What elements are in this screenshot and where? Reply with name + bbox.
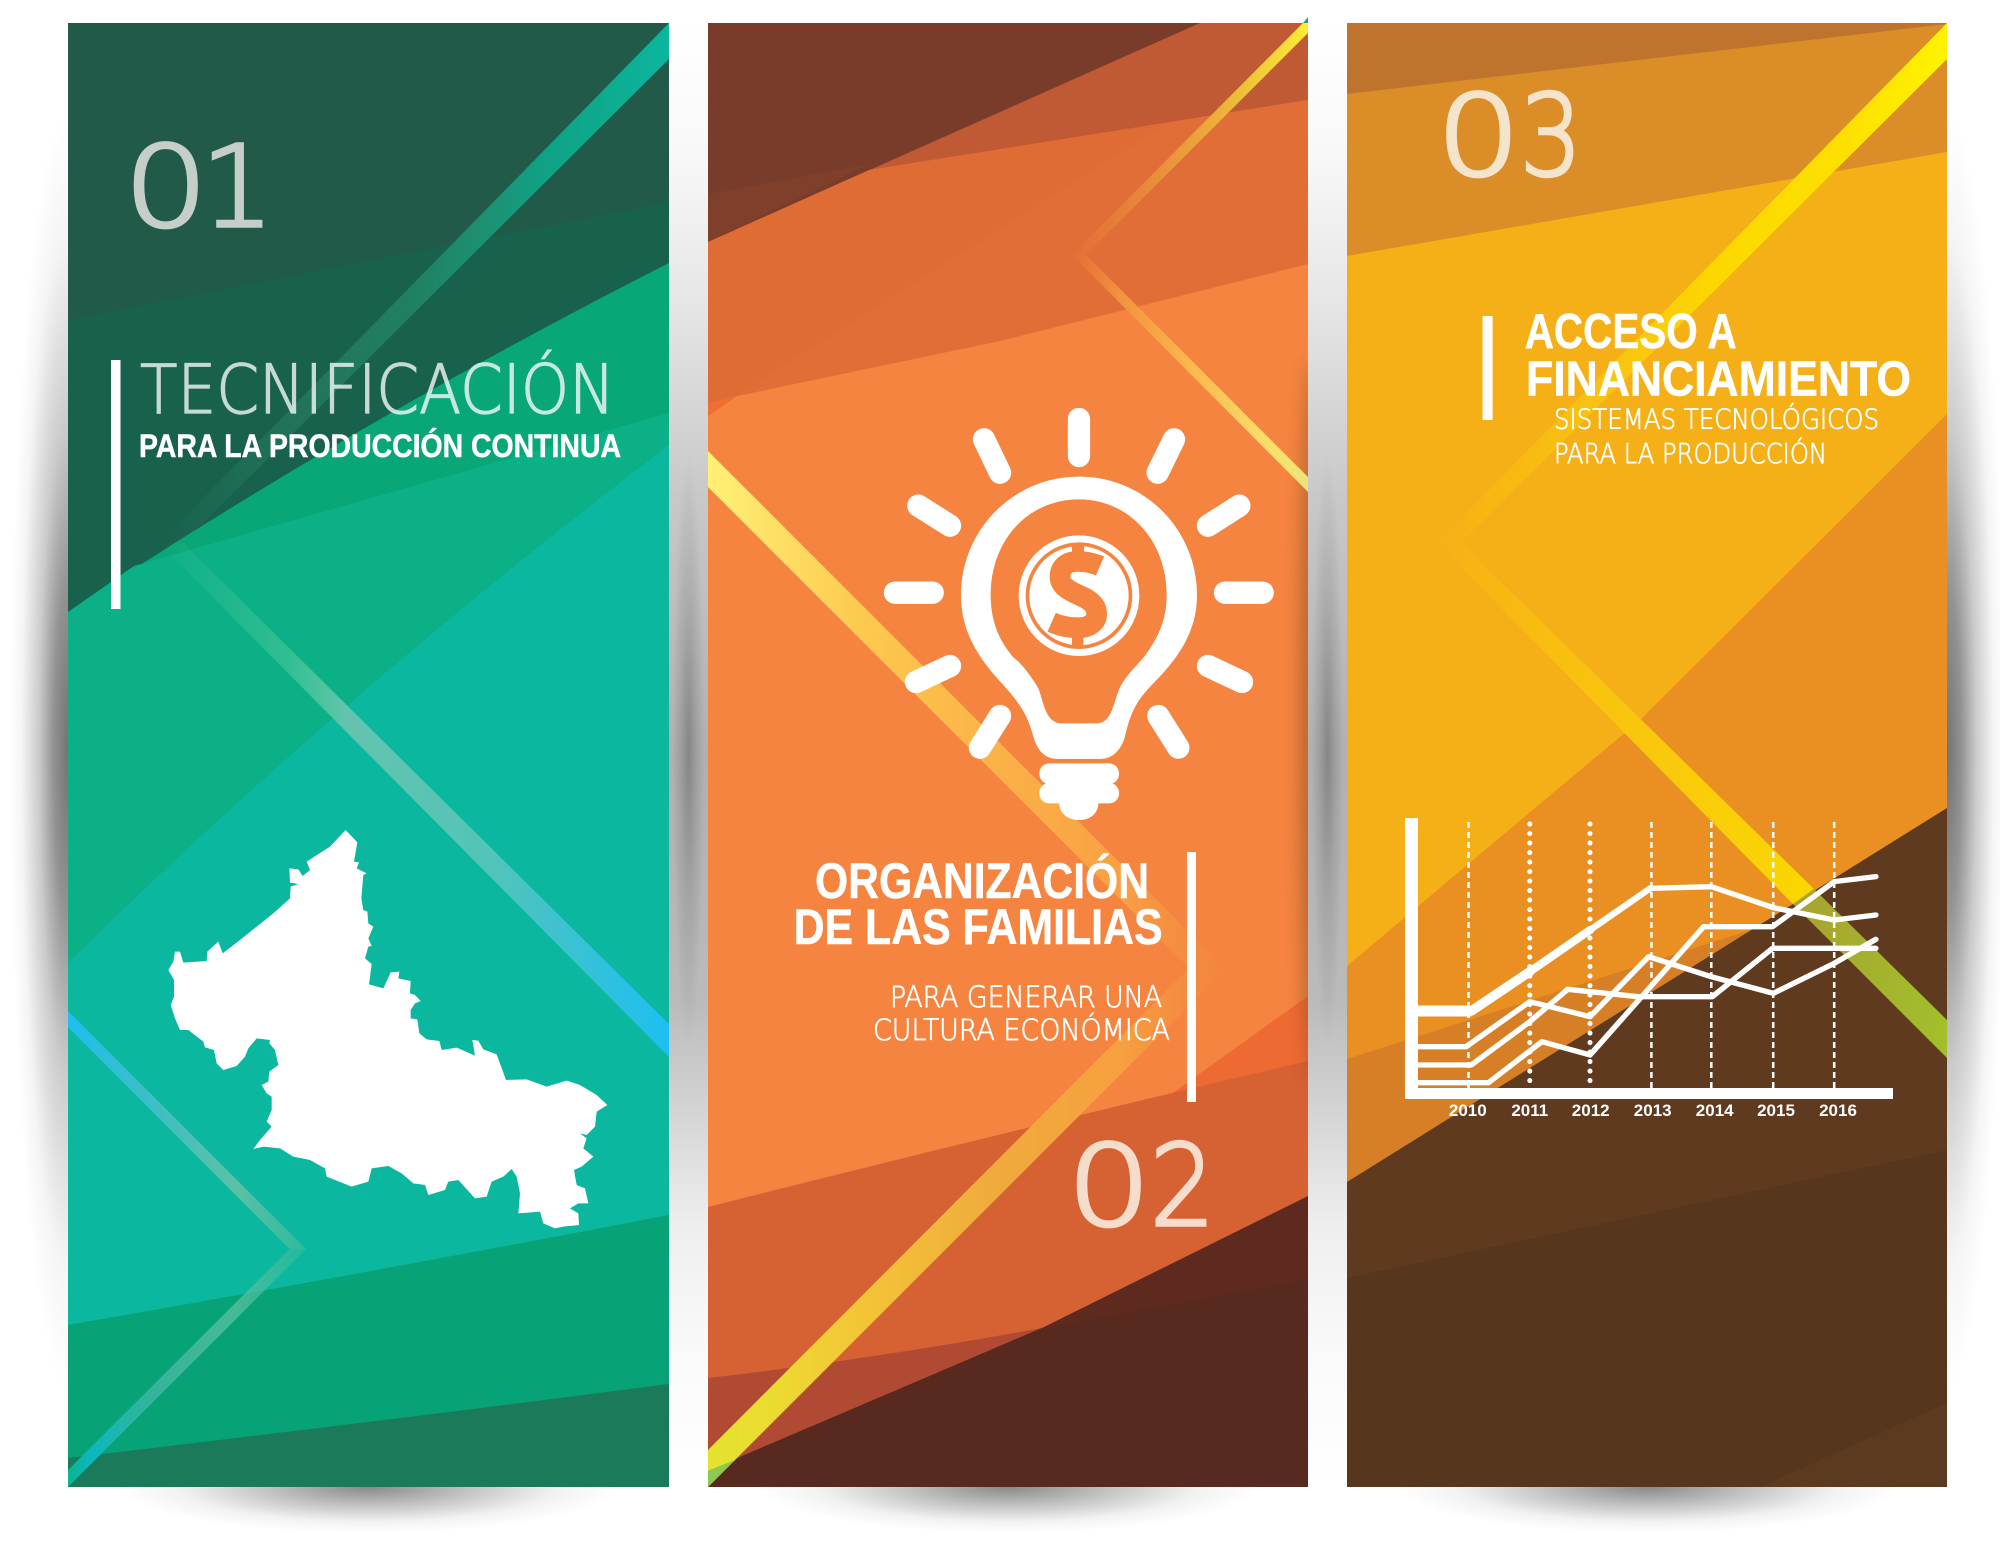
panel 2 diagonal chevrons	[708, 17, 1308, 1487]
heading: acceso a financiamiento: FINANCIAMIENTO	[1526, 352, 1911, 406]
number 03: 3	[1520, 72, 1582, 202]
number 01: 0	[124, 123, 208, 253]
chart year labels: 2011	[1511, 1101, 1548, 1120]
chart year guides	[1468, 822, 1834, 1088]
chart year labels: 2010	[1449, 1101, 1487, 1120]
chart year labels: 2016	[1819, 1101, 1857, 1120]
subheading: sistemas tecnológicos para la producción: SISTEMAS TECNOLÓGICOS	[1554, 402, 1879, 436]
bulb outline	[961, 477, 1197, 759]
number 01	[124, 123, 274, 253]
chart axes	[1405, 818, 1893, 1099]
number 02	[1067, 1122, 1215, 1252]
heading: organización de las familias: DE LAS FAMILIAS	[794, 899, 1163, 955]
accent bar	[1187, 852, 1196, 1102]
panel: 01 tecnificación	[68, 23, 669, 1487]
chart year labels: 2014	[1696, 1101, 1734, 1120]
bulb base	[1039, 763, 1119, 820]
heading: acceso a financiamiento	[1525, 305, 1911, 406]
number 01: 1	[201, 123, 274, 253]
number 02: 2	[1150, 1122, 1215, 1252]
number 03: 0	[1436, 72, 1520, 202]
line chart 2010-2016	[1405, 818, 1893, 1120]
chart year labels: 2015	[1757, 1101, 1795, 1120]
panel 1 background layers	[68, 23, 669, 1487]
heading: acceso a financiamiento: ACCESO A	[1525, 305, 1737, 359]
panel 3 diagonal chevron	[1437, 23, 1947, 1058]
bulb rays	[895, 419, 1263, 748]
panel 2 background layers	[708, 23, 1322, 1487]
subheading: para generar una cultura económica: PARA GENERAR UNA	[890, 980, 1162, 1014]
coin	[1022, 539, 1136, 652]
chart data lines	[1418, 877, 1876, 1083]
number 03	[1436, 72, 1582, 202]
icon: light bulb with dollar coin	[895, 419, 1263, 820]
number 02: 0	[1067, 1122, 1151, 1252]
subheading: para generar una cultura económica	[873, 980, 1170, 1047]
panel 3 background layers	[1347, 23, 1947, 1487]
panel: 03 acceso a financiamiento	[1347, 23, 1947, 1487]
accent bar	[111, 360, 120, 609]
subheading: sistemas tecnológicos para la producción: PARA LA PRODUCCIÓN	[1554, 436, 1827, 470]
panel: 02 organización de las familias	[708, 17, 1322, 1487]
accent bar	[1483, 316, 1493, 420]
heading: organización de las familias: ORGANIZACIÓN	[815, 853, 1149, 909]
chart year labels: 2012	[1572, 1101, 1610, 1120]
icon: map silhouette of the state	[168, 830, 607, 1228]
subheading: sistemas tecnológicos para la producción	[1554, 402, 1879, 470]
heading: tecnificación: TECNIFICACIÓN	[140, 350, 615, 430]
heading: organización de las familias	[794, 853, 1163, 955]
subheading: para la producción continua: PARA LA PRODUCCIÓN CONTINUA	[139, 428, 621, 464]
panel 1 diagonal chevrons	[68, 23, 669, 1487]
chart year labels	[1449, 1101, 1857, 1120]
subheading: para generar una cultura económica: CULTURA ECONÓMICA	[873, 1013, 1170, 1047]
chart year labels: 2013	[1634, 1101, 1672, 1120]
